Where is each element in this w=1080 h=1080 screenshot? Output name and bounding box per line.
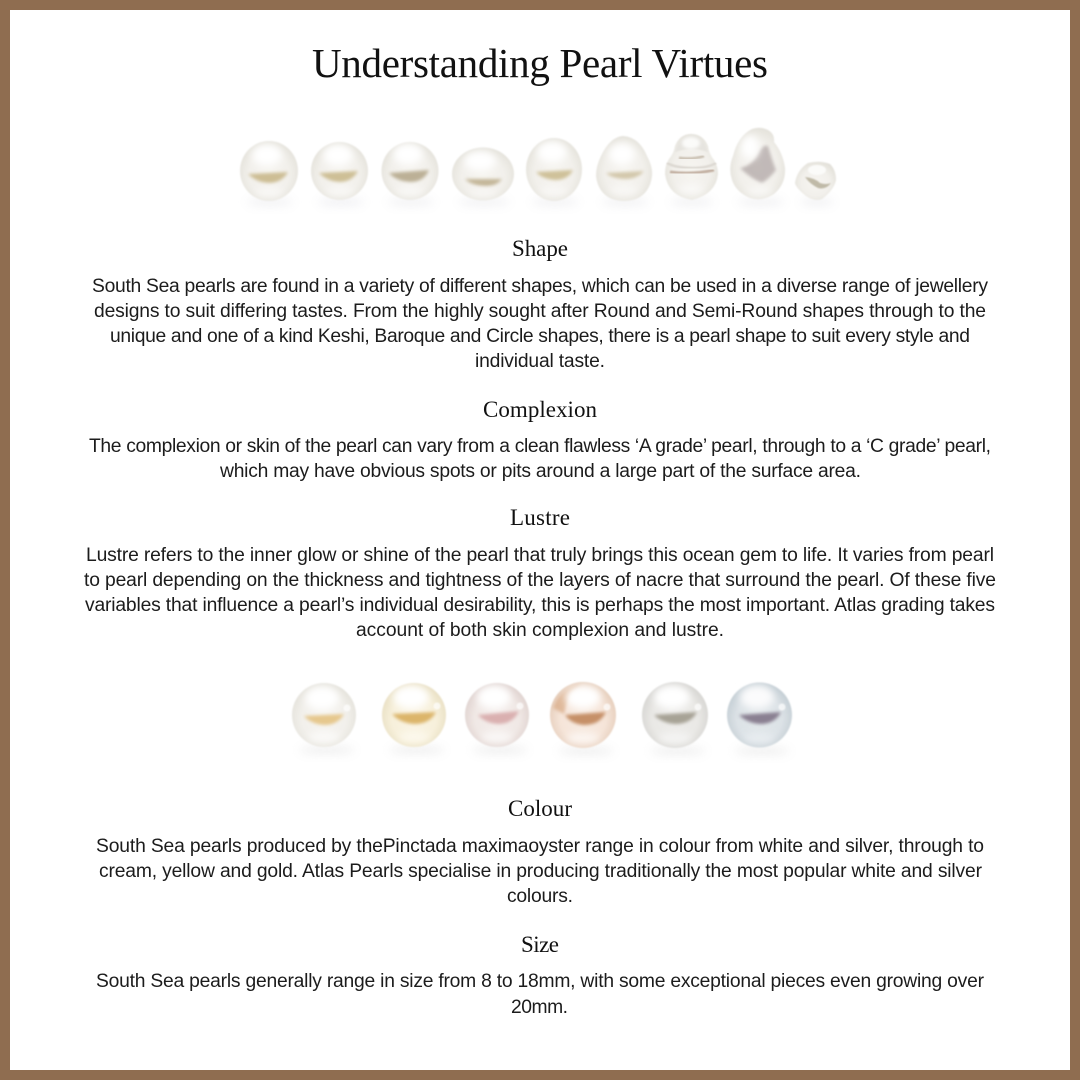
text: shape description: unique and one of a kind Keshi, Baroque and Circle shapes, there is a pearl shape to suit every style and xyxy=(110,326,970,347)
section: size xyxy=(96,932,985,1018)
text: complexion description: which may have obvious spots or pits around a large part of the surface area. xyxy=(219,461,861,482)
section: colour xyxy=(96,796,984,907)
pearl: round 1 xyxy=(240,141,298,205)
heading: complexion: Complexion xyxy=(483,397,598,422)
pearl: white xyxy=(292,683,356,753)
section: lustre xyxy=(84,505,996,641)
text: complexion description xyxy=(89,436,991,482)
heading: shape: Shape xyxy=(512,236,568,261)
pearl colours row xyxy=(292,682,792,754)
pearl: silver xyxy=(642,682,708,754)
text: colour description: cream, yellow and gold. Atlas Pearls specialise in producing traditionally the most popular white and silver xyxy=(99,861,983,882)
text: lustre description: Lustre refers to the inner glow or shine of the pearl that truly brings this ocean gem to life. It varies from pearl xyxy=(86,545,994,566)
text: shape description: individual taste. xyxy=(475,351,605,372)
text: size description xyxy=(96,971,985,1018)
heading: size: Size xyxy=(521,932,559,957)
text: lustre description: variables that influence a pearl’s individual desirability, this is perhaps the most important. Atlas grading takes xyxy=(85,595,995,616)
text: lustre description: to pearl depending on the thickness and tightness of the layers of nacre that surround the pearl. Of these five xyxy=(84,570,996,591)
text: size description: South Sea pearls generally range in size from 8 to 18mm, with some exceptional pieces even growing over xyxy=(96,971,985,992)
text: shape description: South Sea pearls are found in a variety of different shapes, which can be used in a diverse range of jewellery xyxy=(92,276,988,297)
text: colour description: colours. xyxy=(507,886,573,907)
pearl: circle xyxy=(665,134,718,205)
title: Understanding Pearl Virtues xyxy=(312,40,768,86)
pearl: cream xyxy=(382,683,446,753)
pearl: round 2 xyxy=(311,142,368,205)
pearl: pink xyxy=(465,683,529,753)
pearl: blue grey xyxy=(727,682,792,754)
pearl: drop oval xyxy=(452,148,514,205)
text: lustre description xyxy=(84,545,996,641)
text: colour description xyxy=(96,836,984,907)
pearl: peach xyxy=(550,682,616,754)
pearl: button xyxy=(526,138,582,205)
heading: colour: Colour xyxy=(508,796,572,821)
text: lustre description: account of both skin complexion and lustre. xyxy=(356,620,724,641)
section: complexion xyxy=(89,397,991,482)
pearl: baroque xyxy=(730,128,785,205)
pearl: keshi xyxy=(795,162,836,205)
text: shape description xyxy=(92,276,988,372)
text: shape description: designs to suit differing tastes. From the highly sought after Round and Semi-Round shapes through to the xyxy=(94,301,986,322)
pearl shapes row xyxy=(240,128,836,205)
text: colour description: South Sea pearls produced by thePinctada maximaoyster range in colour from white and silver, through to xyxy=(96,836,984,857)
pearl: drop xyxy=(596,136,652,205)
section: shape xyxy=(92,236,988,372)
text: size description: 20mm. xyxy=(511,997,568,1018)
text: complexion description: The complexion or skin of the pearl can vary from a clean flawless ‘A grade’ pearl, through to a ‘C grade’ pearl, xyxy=(89,436,991,457)
heading: lustre: Lustre xyxy=(510,505,570,530)
pearl: semi-round xyxy=(382,142,438,205)
